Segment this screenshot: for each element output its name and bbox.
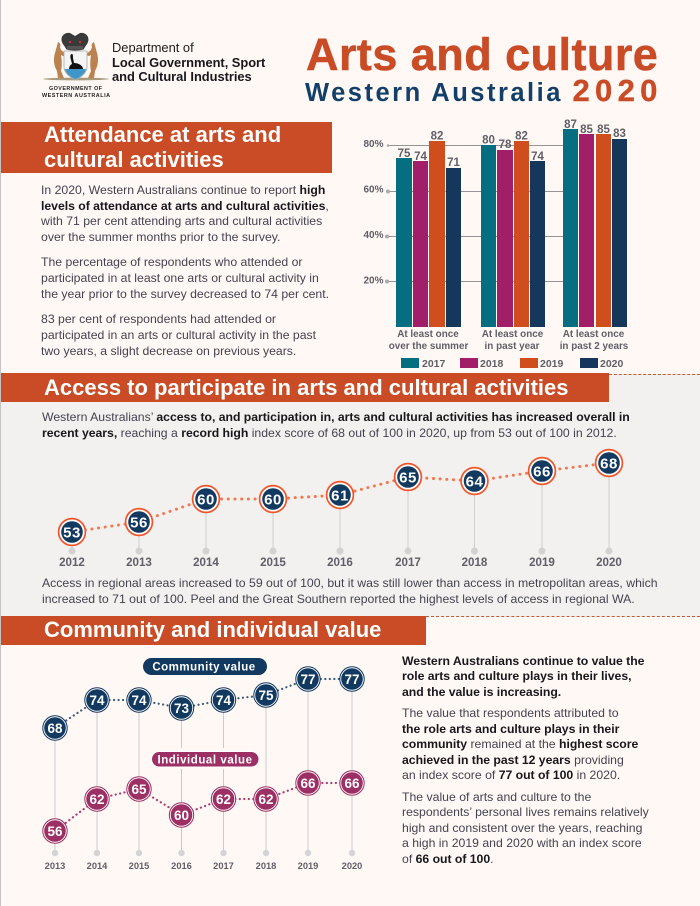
text: regional access: increased to 71 out of 100. Peel and the Great Southern reported the highest levels of access in regional WA. [42,592,635,606]
community value markers: 68 [47,721,63,736]
line chart: access index 2012 to 2020: 2020 [596,556,622,569]
year labels: 2016 [171,861,192,871]
individual value markers: 62 [89,792,105,807]
individual value markers: 62 [216,792,231,807]
heading: community and individual value [1,616,426,645]
text: regional access [42,576,658,606]
line chart: access index 2012 to 2020: 60 [197,492,215,508]
department name: Department of [112,40,194,55]
year labels: 2013 [45,861,65,871]
text: value: a high in 2019 and 2020 with an index score [402,836,642,850]
text: attendance: with 71 per cent attending arts and cultural activities [41,214,322,228]
text: access intro [42,410,630,440]
text: value: Western Australians continue to value the [402,654,644,668]
year labels: 2020 [342,861,362,871]
bar chart: attendance by year: 85 [580,124,593,136]
bar chart: attendance by year: At least once [482,329,544,340]
text: access intro: Western Australians’ access to, and participation in, arts and cultural activities has increased overall in [42,410,630,424]
text: attendance: participated in an arts or cultural activity in the past [41,328,316,342]
label: individual value [148,748,262,769]
line chart: access index 2012 to 2020: 2016 [327,556,353,569]
line chart: access index 2012 to 2020: 56 [130,514,148,532]
bar chart: attendance by year: 80 [482,134,495,146]
line chart: access index 2012 to 2020: 53 [63,524,81,542]
heading: community and individual value: Community and individual value [44,617,381,642]
year labels [45,861,362,871]
bar chart: attendance by year: 60% [363,184,384,196]
text: attendance: participated in at least one arts or cultural activity in [41,271,319,285]
legend [401,358,624,370]
bar chart: attendance by year: 71 [447,157,460,169]
text: attendance: the year prior to the survey decreased to 74 per cent. 83 per cent of respondents had attended or [41,287,329,326]
bar chart: attendance by year: 74 [531,151,544,163]
bar chart: attendance by year: 87 [564,119,577,131]
logo: government of Western Australia coat of arms [42,32,110,99]
line chart: access index 2012 to 2020: 64 [466,474,483,490]
bar chart: attendance by year: 75 [398,148,411,160]
year labels: 2017 [213,861,234,871]
bar chart: attendance by year: 78 [499,139,512,151]
logo: government of Western Australia coat of arms: WESTERN AUSTRALIA [42,93,110,99]
legend: 2017 [422,358,446,370]
panel: access band [1,374,700,616]
individual value markers: 62 [258,792,274,807]
line chart: access index 2012 to 2020: 2013 [126,556,152,569]
year labels: 2014 [87,861,108,871]
subtitle: Western Australia 2020 [305,73,663,108]
label: individual value: Individual value [157,754,253,766]
line chart: access index 2012 to 2020: 60 [264,492,282,508]
line chart: access index 2012 to 2020: 61 [331,488,349,504]
text: value: and the value is increasing. The value that respondents attributed to [402,684,619,720]
heading: attendance: Attendance at arts and [44,122,281,147]
text: value: role arts and culture plays in their lives, [402,669,632,683]
text: access intro: recent years, reaching a record high index score of 68 out of 100 in 2020, up from 53 out of 100 in 2012. [42,426,617,440]
label: community value: Community value [152,662,256,674]
individual value markers: 65 [131,782,147,797]
logo: government of Western Australia coat of arms: GOVERNMENT OF [49,86,103,92]
individual value markers: 60 [174,808,189,823]
text: value: achieved in the past 12 years providing [402,753,624,767]
line chart: access index 2012 to 2020: 68 [600,456,618,472]
bar chart: attendance by year: in past year [485,341,540,352]
legend: 2020 [600,358,624,370]
text: value: the role arts and culture plays in their [402,722,619,736]
line chart: access index 2012 to 2020: 65 [399,470,417,486]
line chart: access index 2012 to 2020 [58,448,624,569]
community value markers: 74 [131,693,147,708]
legend: 2018 [480,358,504,370]
legend: 2019 [540,358,564,370]
year labels: 2015 [129,861,149,871]
line chart: access index 2012 to 2020: 2014 [193,556,219,569]
bar chart: attendance by year: 80% [363,139,384,150]
text: attendance: levels of attendance at arts and cultural activities, [41,199,329,213]
text: value: high and consistent over the years, reaching [402,821,642,835]
community value markers: 73 [174,701,189,716]
bar chart: attendance by year: At least once [397,329,459,340]
bar chart: attendance by year: in past 2 years [560,341,629,352]
left page edge [0,0,1,906]
year labels: 2018 [256,861,276,871]
community value markers: 75 [258,688,274,703]
bar chart: attendance by year: 74 [414,151,427,163]
line chart: access index 2012 to 2020: 2018 [462,556,488,569]
bar chart: attendance by year: 85 [597,124,610,136]
text: attendance: two years, a slight decrease on previous years. [41,344,296,358]
line chart: access index 2012 to 2020: 66 [533,464,551,480]
line chart: access index 2012 to 2020: 2015 [260,556,286,569]
label: community value [143,658,267,675]
line chart: access index 2012 to 2020: 2019 [529,556,555,569]
text: attendance [41,183,329,358]
text: value: community remained at the highest score [402,737,638,751]
line chart: access index 2012 to 2020: 2012 [59,556,85,569]
text: value: an index score of 77 out of 100 in 2020. The value of arts and culture to the [402,768,620,804]
text: value: respondents’ personal lives remains relatively [402,805,649,819]
text: attendance: over the summer months prior to the survey. The percentage of respondents who attended or [41,230,303,269]
bar chart: attendance by year: At least once [563,329,625,340]
bar chart: attendance by year: 83 [613,128,626,140]
community value markers: 77 [344,672,360,687]
individual value markers: 66 [344,776,360,791]
text: value: of 66 out of 100. [402,852,494,866]
department name [112,40,266,84]
heading: attendance: cultural activities [44,146,224,172]
bar chart: attendance by year: over the summer [389,341,468,352]
bar chart: attendance by year: 82 [515,130,528,142]
individual value markers: 66 [300,776,316,791]
individual value markers: 56 [47,824,63,839]
bar chart: attendance by year: 82 [431,130,443,142]
text: regional access: Access in regional areas increased to 59 out of 100, but it was still lower than access in metropolitan areas, which [42,576,658,590]
text: value [402,654,649,866]
community value markers [43,667,364,740]
bar chart: attendance by year: 40% [363,230,384,241]
line chart: community and individual value 2013 to 2020 [42,658,365,871]
line chart: access index 2012 to 2020: 2017 [395,556,421,569]
heading: access: Access to participate in arts and cultural activities [44,375,569,400]
community value markers: 77 [300,672,316,687]
community value markers: 74 [89,693,105,708]
text: attendance: In 2020, Western Australians continue to report high [41,183,325,197]
bar chart: attendance by year [363,119,629,370]
department name: Local Government, Sport [112,55,265,70]
department name: and Cultural Industries [112,69,252,84]
community value markers: 74 [216,693,231,708]
bar chart: attendance by year: 20% [363,276,384,286]
year labels: 2019 [298,861,318,871]
individual value markers [43,771,364,843]
title: Arts and culture [306,29,658,80]
heading: attendance [1,122,332,173]
